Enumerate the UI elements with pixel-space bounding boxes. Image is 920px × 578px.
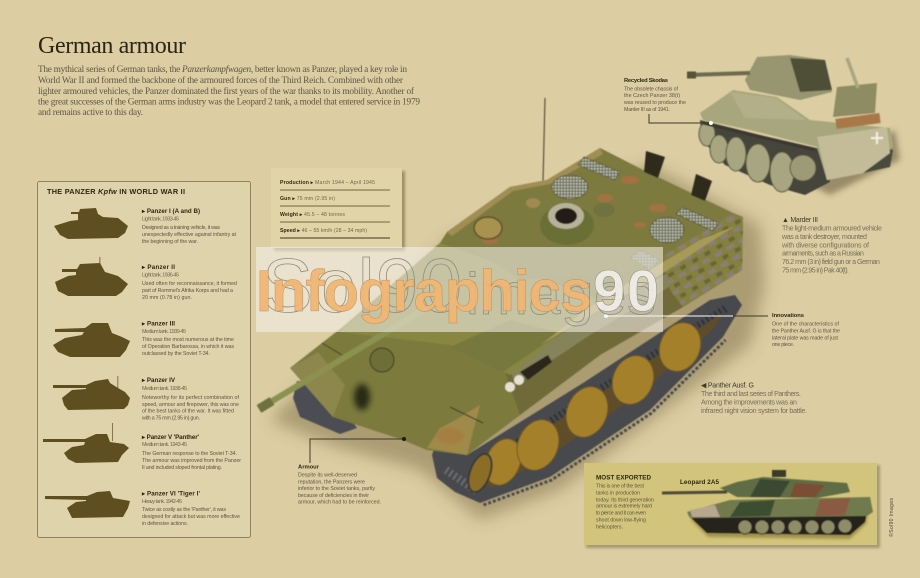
text: Panzer VI Tiger <box>141 490 240 527</box>
marder upper track strip <box>703 123 815 150</box>
text: Marder III: The light-medium armoured vehicle <box>782 224 882 232</box>
heading: MOST EXPORTED <box>596 474 651 482</box>
sprocket <box>464 451 496 495</box>
text: Marder III: was a tank destroyer, mounted <box>781 233 867 241</box>
panel: the Panzer Kpfw in World War II <box>38 182 250 538</box>
text: Panzer III: of Operation Barbarossa, in which it was <box>142 344 234 350</box>
text: Marder III: 76.2 mm (3 in) field gun or a German <box>782 258 880 266</box>
intro text block: and remains active to this day. <box>38 108 143 118</box>
tools and white fittings <box>505 355 552 392</box>
watermark: Infographics <box>256 259 592 324</box>
marder track <box>700 120 830 195</box>
text: Panzer IV: of the best tanks of the war. It was fitted <box>142 408 234 414</box>
text: Panzer IV <box>141 377 240 422</box>
callout: Innovations: One of the characteristics of <box>772 322 840 328</box>
text: Panzer II: 20 mm (0.78 in) gun. <box>142 295 192 301</box>
description: to pierce and it can even <box>596 510 646 516</box>
side skirt and stowage <box>505 230 742 415</box>
icon: Panzer IV silhouette <box>53 376 130 410</box>
callout: Innovations <box>604 313 840 348</box>
text: Panzer II: Used often for reconnaissance, it formed <box>142 281 237 287</box>
text: Panzer V Panther: Medium tank. 1943-45 <box>142 442 187 448</box>
scorch mark <box>354 384 370 410</box>
marder rod <box>847 58 858 88</box>
description: This is one of the best <box>596 484 645 490</box>
text: Panzer VI Tiger: designed for attack but was more effective <box>142 514 240 520</box>
text: Panzer II <box>141 264 237 301</box>
superstructure side <box>540 226 735 345</box>
text: Panther Ausf. G <box>701 382 807 415</box>
text: Panzer III: This was the most numerous at the time <box>142 337 234 343</box>
text: Panther Ausf. G: The third and last series of Panthers. <box>701 390 801 398</box>
hull <box>290 148 743 455</box>
text: Panzer V Panther: II and included sloped frontal plating. <box>142 465 222 471</box>
text: Panzer I: unexpectedly effective against infantry at <box>142 232 237 238</box>
illustration: Marder III tank <box>687 55 900 195</box>
marder fighting compartment <box>745 55 832 100</box>
text: Marder III: armaments, such as a Russian <box>782 250 864 258</box>
callout: Armour: armour, which had to be reinforced. <box>298 500 381 506</box>
description: helicopters. <box>596 524 623 530</box>
label: Leopard 2A5 <box>680 479 719 486</box>
commander cupola <box>540 203 594 245</box>
text: Panzer II: Light tank. 1936-45 <box>142 272 179 278</box>
intro text block: lighter armoured vehicles, the Panzer dominated the first years of the war thanks to its mobility. Another of <box>38 86 415 97</box>
tan weathering on front <box>290 352 345 417</box>
road wheels <box>478 316 708 491</box>
callout: Armour: because of deficiencies in their <box>298 493 369 499</box>
rear deck <box>447 148 733 280</box>
text: Panzer IV: ▸ Panzer IV <box>141 377 176 384</box>
intro text block: World War II and formed the backbone of the armoured forces of the Third Reich. Combined with other <box>38 75 404 86</box>
text: Panzer V Panther: The armour was improved from the Panzer <box>142 458 241 464</box>
text: Panther Ausf. G: infrared night vision system for battle. <box>701 407 807 415</box>
speed: Speed ▸ 46 – 55 km/h (28 – 34 mph) <box>280 228 367 234</box>
text: Panzer VI Tiger: in defensive actions. <box>142 521 188 527</box>
hatches <box>474 217 502 239</box>
road wheels <box>738 519 852 534</box>
text: Panzer IV: with a 75 mm (2.95 in) gun. <box>142 416 200 422</box>
side plate with zimmerit <box>660 213 743 307</box>
text: Panzer IV: speed, armour and firepower, this was one <box>142 402 239 408</box>
credit: ©Sol90 Images <box>888 498 895 537</box>
text: Panzer IV: Medium tank. 1938-45 <box>142 386 187 392</box>
description: shoot down low-flying <box>596 518 646 524</box>
text: Panzer VI Tiger: ▸ Panzer VI 'Tiger I' <box>141 490 201 498</box>
text: Panzer III: ▸ Panzer III <box>141 320 175 328</box>
text: Marder III: ▲ Marder III <box>782 217 818 224</box>
fender seam lines <box>322 343 483 423</box>
text: Panzer V Panther: The German response to the Soviet T-34. <box>142 451 237 457</box>
text: Panzer VI Tiger: Twice as costly as the 'Panther', it was <box>142 507 226 513</box>
text: Panther Ausf. G: ◀ Panther Ausf. G <box>701 382 754 390</box>
icon: Panzer I silhouette <box>54 208 128 239</box>
text: Panther Ausf. G: Among the improvements was an <box>701 398 797 406</box>
text: Panzer IV: Noteworthy for its perfect combination of <box>142 395 240 401</box>
illustration: Leopard 2A5 tank <box>662 470 873 539</box>
callout: Innovations: lateral plate was made of just <box>772 336 839 342</box>
callout: Armour: Armour <box>298 464 320 470</box>
illustration: Panther Ausf. G tank <box>259 98 765 520</box>
text: Panzer I: Light tank. 1933-45 <box>142 216 179 222</box>
description: tanks in production <box>596 490 640 496</box>
text: Panzer I: ▸ Panzer I (A and B) <box>141 208 200 215</box>
description <box>596 484 654 530</box>
description: armour is extremely hard <box>596 504 652 510</box>
camouflage patches <box>690 479 850 517</box>
gun: Gun ▸ 75 mm (2.95 in) <box>280 196 335 202</box>
weight: Weight ▸ 45.5 – 48 tonnes <box>280 212 345 218</box>
callout: Armour <box>298 437 406 506</box>
text: Panzer III: outclassed by the Soviet T-34. <box>142 351 210 357</box>
panel heading: THE PANZER Kpfw IN WORLD WAR II <box>47 187 185 196</box>
camouflage patches <box>482 176 667 244</box>
marder cross marking <box>871 132 883 144</box>
icon: Panzer III silhouette <box>53 323 130 357</box>
gun barrel <box>259 300 440 409</box>
watermark: Sol90 <box>262 244 462 329</box>
text: Panzer V Panther <box>141 434 241 471</box>
production: Production ▸ March 1944 – April 1945 <box>280 180 375 186</box>
stowage roll <box>836 118 880 124</box>
callout: Armour: reputation, the Panzers were <box>298 480 365 486</box>
text: Marder III <box>781 217 882 274</box>
title: German armour <box>38 33 186 59</box>
watermark: images <box>466 262 656 327</box>
text: Panzer I: Designed as a training vehicle, it was <box>142 225 220 231</box>
text: Panzer I <box>141 208 237 245</box>
description: today. Its third generation <box>596 498 654 504</box>
intro text block: the great successes of the German arms industry was the Leopard 2 tank, a model that entered service in 1979 <box>38 96 420 108</box>
intro text block: The mythical series of German tanks, the Panzerkampfwagen, better known as Panzer, played a key role in <box>38 64 407 75</box>
intro text block <box>38 64 420 118</box>
callout: Recycled Skodas: Marder III as of 1941. <box>624 107 670 113</box>
icon: Panzer VI Tiger silhouette <box>45 491 130 518</box>
callout: Innovations: the Panther Ausf. G is that the <box>772 328 840 334</box>
text: Marder III: 75 mm (2.95 in) Pak 40(t). <box>782 266 849 274</box>
text: Panzer III: Medium tank. 1939-45 <box>142 329 186 335</box>
marder hull <box>700 90 893 180</box>
watermark <box>256 244 663 332</box>
text: Panzer V Panther: ▸ Panzer V 'Panther' <box>141 434 200 441</box>
callout: Innovations: Innovations <box>772 313 804 319</box>
panel: most exported <box>584 463 880 548</box>
text: Panzer III <box>141 320 234 357</box>
icon: Panzer V Panther silhouette <box>43 423 129 463</box>
marder road wheels <box>699 122 816 192</box>
callout: Recycled Skodas <box>624 78 713 125</box>
machine-gun ball mount <box>370 348 394 372</box>
text: Panzer II: part of Rommel's Afrika Korps and had a <box>142 288 233 294</box>
superstructure front plate <box>340 243 600 375</box>
text: Panzer II: ▸ Panzer II <box>141 264 175 271</box>
text: Panzer I: the beginning of the war. <box>142 239 198 245</box>
callout: Recycled Skodas: The obsolete chassis of <box>624 86 679 92</box>
callout: Recycled Skodas: was reused to produce the <box>624 100 686 106</box>
track <box>432 295 742 505</box>
engine grills <box>552 157 719 270</box>
antenna <box>543 98 545 182</box>
callout: Recycled Skodas: the Czech Panzer 38(t) <box>624 93 680 99</box>
text: Marder III: with diverse configurations of <box>781 242 869 250</box>
callout: Armour: inferior to the Soviet tanks, partly <box>298 486 375 492</box>
icon: Panzer II silhouette <box>55 257 128 296</box>
marder gun <box>687 73 750 75</box>
callout: Recycled Skodas: Recycled Skodas <box>624 78 668 84</box>
marder rack <box>833 83 877 117</box>
watermark: 90 <box>593 259 659 324</box>
callout: Innovations: one piece. <box>772 342 794 348</box>
exhaust pipes <box>644 151 712 201</box>
front left track <box>293 381 357 434</box>
text: Panzer VI Tiger: Heavy tank. 1942-45 <box>142 499 182 505</box>
spec box <box>271 168 405 251</box>
callout: Armour: Despite its well-deserved <box>298 472 357 478</box>
